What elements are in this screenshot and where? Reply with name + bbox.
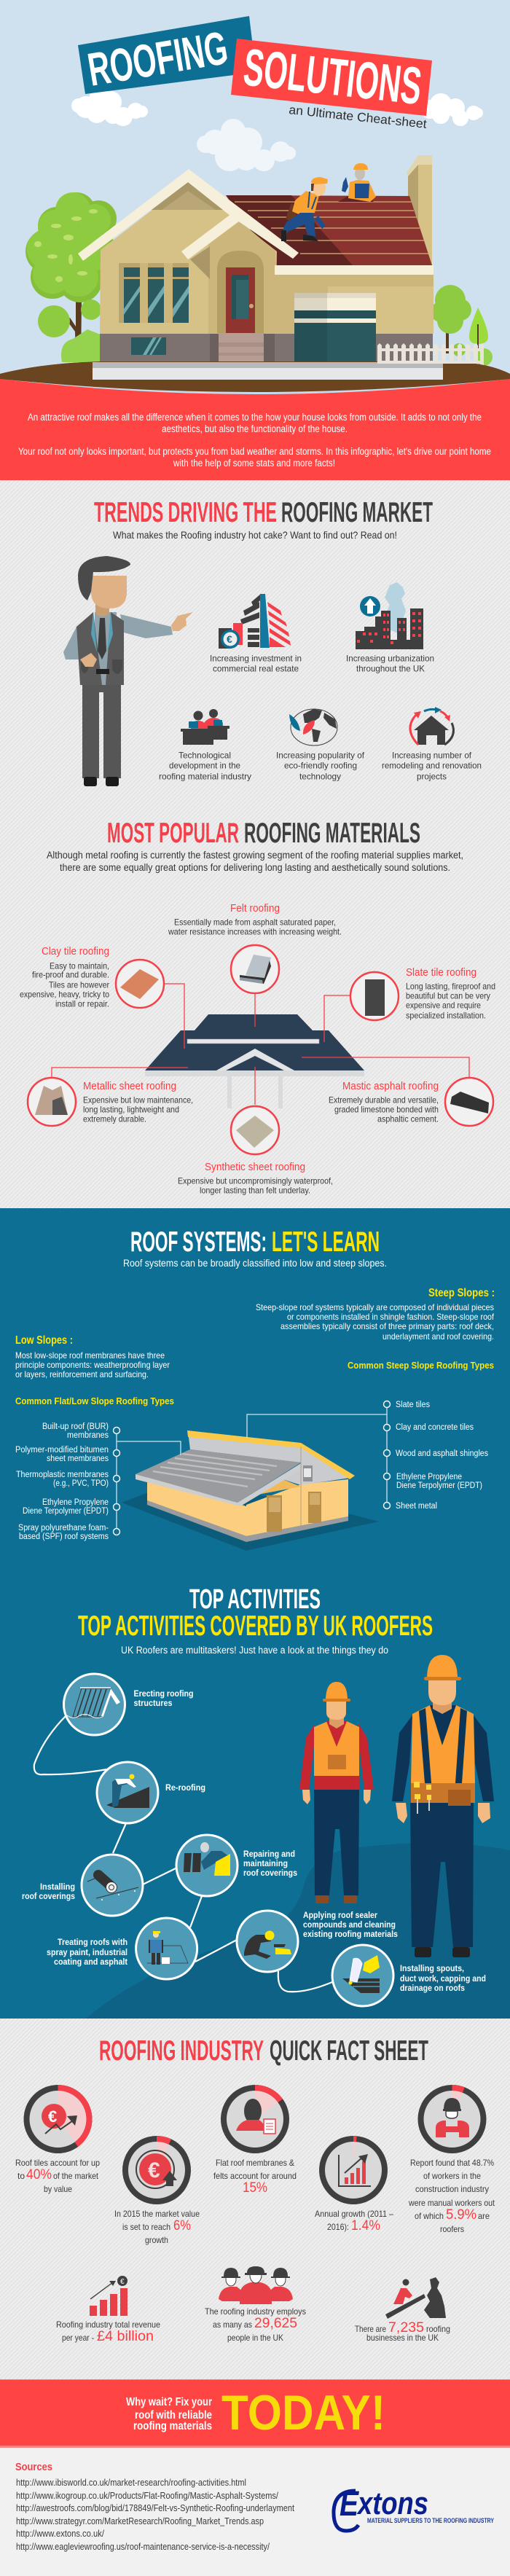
- house illustration: [122, 1430, 379, 1551]
- icon: building and coins: €: [227, 633, 232, 645]
- label: spray paint, industrial: [47, 1947, 128, 1957]
- label: [159, 751, 251, 781]
- sources heading: Sources: [15, 2462, 52, 2473]
- heading: ROOF SYSTEMS:: [130, 1226, 267, 1258]
- label: [210, 653, 302, 673]
- text: is set to reach: [122, 2222, 170, 2232]
- description: expensive and require: [406, 1000, 481, 1010]
- label: [47, 1937, 128, 1967]
- panel: hero: [0, 0, 510, 408]
- fact: construction workers: [408, 2088, 495, 2234]
- description: long lasting, lightweight and: [83, 1105, 179, 1115]
- source list: http://www.ikogroup.co.uk/Products/Flat-Roofing/Mastic-Asphalt-Systems/: [16, 2491, 278, 2501]
- source list: http://www.eagleviewroofing.us/roof-maintenance-service-is-a-necessity/: [16, 2542, 270, 2552]
- icon: roofer and UK map: [385, 2277, 446, 2319]
- attic shade: [152, 182, 224, 210]
- panel: call to action: [0, 2379, 510, 2448]
- description: specialized installation.: [406, 1010, 486, 1020]
- description: [168, 917, 342, 937]
- icon: people at desks: [181, 709, 230, 745]
- fact: revenue: [56, 2276, 160, 2344]
- label: structures: [134, 1698, 173, 1708]
- label: Installing spouts,: [400, 1963, 464, 1973]
- description: Tiles are however: [49, 979, 109, 990]
- icon: man on roof: [106, 1774, 149, 1808]
- label: roof coverings: [22, 1891, 75, 1901]
- label: Increasing number of: [392, 751, 472, 761]
- material: slate: Slate tile roofing: [406, 967, 476, 979]
- icon: felt sheets: [231, 945, 279, 993]
- icon: presenter man: [63, 556, 193, 786]
- label: Installing: [40, 1882, 75, 1892]
- fact: annual growth: 1.4%: [351, 2218, 380, 2234]
- text: [315, 2209, 393, 2232]
- text: businesses in the UK: [366, 2333, 439, 2343]
- low slope list: membranes: [67, 1431, 109, 1440]
- icon: left tree: [26, 192, 117, 362]
- label: remodeling and renovation: [382, 761, 482, 771]
- description: water resistance increases with increasing weight.: [168, 927, 342, 937]
- logo: extons: E: [340, 2485, 360, 2524]
- trend: remodeling: [382, 707, 482, 781]
- text: felts account for around: [213, 2171, 297, 2181]
- text: as many as: [213, 2319, 252, 2330]
- text: growth: [145, 2235, 168, 2245]
- description: [83, 1095, 193, 1124]
- icon: UK skyline: [356, 582, 423, 649]
- fact: businesses: 7,235: [388, 2320, 424, 2336]
- icon: globe and leaf: [289, 709, 337, 745]
- low slope list: Diene Terpolymer (EPDT): [23, 1507, 109, 1516]
- panel: intro: [0, 361, 510, 480]
- background hill: [86, 1843, 510, 2019]
- text: of which: [415, 2211, 444, 2221]
- label: development in the: [169, 761, 240, 771]
- title banner: solutions: [231, 38, 432, 116]
- intro text: aesthetics, but also the functionality of the house.: [162, 423, 348, 434]
- description: [329, 1095, 439, 1124]
- icon: asphalt block: [445, 1078, 493, 1126]
- label: roofing material industry: [159, 771, 251, 781]
- icon: cloud left: [71, 87, 148, 126]
- text: Roof tiles account for up: [15, 2158, 100, 2168]
- fact: construction workers: 5.9%: [446, 2207, 476, 2223]
- ring chart 15%: [224, 2088, 286, 2150]
- description: Essentially made from asphalt saturated paper,: [174, 917, 336, 927]
- heading: TRENDS DRIVING THE: [94, 497, 277, 528]
- icon: roof frame: [67, 1688, 120, 1718]
- ground hill: [0, 361, 510, 391]
- text: [213, 2158, 297, 2181]
- icon: spout tool: [342, 1955, 380, 1993]
- steep slope list: Slate tiles: [396, 1401, 430, 1409]
- fact: annual growth: [315, 2139, 393, 2234]
- label: [400, 1963, 486, 1993]
- activity: erecting: [64, 1674, 194, 1735]
- material: felt: Felt roofing: [230, 903, 280, 915]
- ring chart 6%: €: [148, 2158, 160, 2182]
- label: [22, 1882, 75, 1901]
- text: [15, 2158, 100, 2194]
- ring chart 40%: [26, 2088, 89, 2150]
- heading: ROOFING INDUSTRY: [99, 2035, 264, 2067]
- label: eco-friendly roofing: [284, 761, 357, 771]
- source list: http://www.strategyr.com/MarketResearch/Roofing_Market_Trends.asp: [16, 2516, 264, 2526]
- intro paragraph: [47, 850, 463, 873]
- icon: man repairing: [184, 1842, 230, 1876]
- material: mastic: [329, 1078, 493, 1126]
- low slope list: Polymer-modified bitumen: [15, 1446, 109, 1455]
- source list: [16, 2478, 294, 2552]
- roof diagram: [145, 1014, 364, 1108]
- low slope list: Ethylene Propylene: [42, 1498, 109, 1507]
- text: [205, 2306, 306, 2343]
- garage door: [294, 293, 376, 362]
- text: of the market: [53, 2171, 99, 2181]
- description: Expensive but low maintenance,: [83, 1095, 193, 1105]
- subheading: What makes the Roofing industry hot cake? Want to find out? Read on!: [113, 529, 397, 541]
- icon: pale cloud: [197, 119, 296, 171]
- low slopes text: or layers, reinforcement and surfacing.: [15, 1369, 149, 1379]
- text: [56, 2319, 160, 2343]
- icon: cloud right: [420, 93, 483, 126]
- text: construction industry: [415, 2184, 489, 2194]
- intro paragraph: there are some equally great options for delivering long lasting and aesthetically sound solutions.: [60, 862, 450, 873]
- logo: extons: [334, 2485, 494, 2531]
- ring chart 40%: €: [48, 2107, 57, 2126]
- connector path: [34, 1715, 332, 1992]
- material: mastic: Mastic asphalt roofing: [342, 1081, 439, 1092]
- trend: commercial real estate: [210, 594, 302, 673]
- call text: roof with reliable: [135, 2409, 212, 2422]
- material: clay: [20, 946, 164, 1009]
- description: longer lasting than felt underlay.: [200, 1185, 310, 1195]
- low slopes text: Common Flat/Low Slope Roofing Types: [15, 1395, 174, 1406]
- description: beautiful but can be very: [406, 991, 490, 1001]
- text: There are: [355, 2324, 386, 2334]
- sidewalk: [93, 362, 443, 379]
- icon: metal sheet: [28, 1078, 76, 1126]
- activity: re-roofing: [97, 1762, 205, 1823]
- roof trim: [78, 169, 434, 279]
- title word: ROOFING: [84, 21, 232, 96]
- text: Annual growth (2011 –: [315, 2209, 393, 2219]
- source list: http://www.ibisworld.co.uk/market-research/roofing-activities.html: [16, 2478, 246, 2488]
- icon: standing roofer: [338, 163, 376, 202]
- material: metallic: [28, 1078, 193, 1126]
- icon: synthetic sheet: [231, 1106, 279, 1154]
- ring chart 6%: [125, 2139, 188, 2201]
- small gable wall: [208, 221, 275, 334]
- text: of workers in the: [423, 2171, 481, 2181]
- material: synthetic: Synthetic sheet roofing: [205, 1162, 305, 1173]
- low slope list: (e.g., PVC, TPO): [53, 1479, 109, 1488]
- description: [20, 960, 109, 1009]
- label: [276, 751, 365, 781]
- text: The roofing industry employs: [205, 2306, 306, 2317]
- label: throughout the UK: [356, 663, 425, 673]
- low slopes text: Low Slopes :: [15, 1334, 73, 1347]
- trend: eco-friendly: [276, 709, 365, 781]
- label: projects: [417, 771, 447, 781]
- label: Erecting roofing: [134, 1688, 194, 1699]
- low slope list: Thermoplastic membranes: [16, 1471, 109, 1479]
- icon: roll: [87, 1875, 138, 1900]
- subtitle: an Ultimate Cheat-sheet: [289, 103, 428, 131]
- steep slope list: Diene Terpolymer (EPDT): [396, 1481, 482, 1490]
- label: Treating roofs with: [58, 1937, 128, 1947]
- label: [346, 653, 434, 673]
- label: compounds and cleaning: [303, 1919, 396, 1930]
- description: extremely durable.: [83, 1113, 146, 1124]
- fact: market value: 6%: [173, 2218, 191, 2234]
- label: technology: [299, 771, 341, 781]
- heading: MOST POPULAR: [107, 818, 239, 849]
- description: fire-proof and durable.: [32, 969, 109, 979]
- text: [408, 2158, 495, 2234]
- label: coating and asphalt: [54, 1957, 128, 1967]
- low slope dots: [114, 1427, 119, 1535]
- low slope connector: [117, 1430, 181, 1532]
- call text: Why wait? Fix your: [126, 2396, 212, 2408]
- icon: house with arrows: [410, 707, 453, 745]
- text: people in the UK: [227, 2333, 283, 2343]
- text: to: [17, 2171, 25, 2181]
- ring chart 5.9%: [421, 2088, 484, 2150]
- icon: kneeling man: [244, 1931, 291, 1959]
- text: roofers: [440, 2224, 464, 2234]
- material: slate: [350, 967, 495, 1020]
- icon: right worker: [392, 1655, 494, 1957]
- activity: installing coverings: [22, 1855, 143, 1916]
- material: clay: Clay tile roofing: [42, 946, 109, 958]
- text: In 2015 the market value: [114, 2209, 200, 2219]
- call text: [126, 2396, 212, 2432]
- description: Extremely durable and versatile,: [329, 1095, 439, 1105]
- connector lines: [52, 984, 469, 1105]
- subheading: Roof systems can be broadly classified into low and steep slopes.: [123, 1257, 387, 1269]
- fact: employment: [205, 2266, 306, 2343]
- description: graded limestone bonded with: [334, 1105, 439, 1115]
- text: were manual workers out: [408, 2198, 495, 2208]
- steep slope list: Wood and asphalt shingles: [396, 1449, 488, 1458]
- icon: right trees: [431, 285, 493, 366]
- label: duct work, capping and: [400, 1973, 486, 1984]
- low slope list: Built-up roof (BUR): [42, 1422, 109, 1431]
- fact: roof tiles: [15, 2088, 100, 2194]
- text: are: [478, 2211, 490, 2221]
- icon: clay tile: [116, 960, 164, 1008]
- steep slope list: Ethylene Propylene: [396, 1473, 462, 1481]
- panel: top activities: [22, 1584, 510, 2019]
- fact: employment: 29,625: [254, 2316, 297, 2331]
- steep slopes text: underlayment and roof covering.: [382, 1331, 494, 1342]
- low slopes text: Most low-slope roof membranes have three: [15, 1350, 165, 1361]
- heading: TOP ACTIVITIES: [189, 1584, 321, 1615]
- fact: revenue: £4 billion: [97, 2329, 154, 2344]
- material: synthetic: [178, 1106, 333, 1195]
- fact: businesses: [355, 2277, 450, 2343]
- label: Applying roof sealer: [303, 1910, 377, 1920]
- icon: revenue bars: [90, 2276, 128, 2316]
- activity: applying sealer: [237, 1910, 398, 1972]
- steep slopes text: Common Steep Slope Roofing Types: [348, 1360, 494, 1371]
- description: install or repair.: [55, 998, 109, 1009]
- low slope list: sheet membranes: [47, 1455, 109, 1463]
- label: drainage on roofs: [400, 1983, 465, 1993]
- text: Flat roof membranes &: [216, 2158, 294, 2168]
- steps: [219, 333, 264, 362]
- label: Increasing popularity of: [276, 751, 365, 761]
- label: [134, 1688, 194, 1708]
- panel: roof systems: [0, 1208, 510, 2019]
- label: maintaining: [243, 1858, 288, 1868]
- label: existing roofing materials: [303, 1929, 398, 1939]
- foundation: [100, 334, 433, 362]
- description: Expensive but uncompromisingly waterproof,: [178, 1176, 333, 1186]
- fence: [377, 343, 484, 369]
- material: metallic: Metallic sheet roofing: [83, 1081, 176, 1092]
- heading: LET'S LEARN: [272, 1226, 380, 1258]
- panel: trends: [0, 480, 510, 1209]
- steep slope list: Clay and concrete tiles: [396, 1423, 474, 1432]
- text: 2016):: [327, 2222, 349, 2232]
- panel: fact sheet: [0, 2019, 510, 2379]
- panel: sources: [15, 2462, 494, 2552]
- text: by value: [44, 2184, 72, 2194]
- low slope list: [15, 1422, 109, 1541]
- steep slope dots: [383, 1401, 391, 1508]
- label: [303, 1910, 398, 1939]
- intro text: with the help of some stats and more facts!: [173, 458, 335, 469]
- steep slopes text: assemblies typically consist of three primary parts: roof deck,: [280, 1321, 494, 1331]
- description: asphaltic cement.: [377, 1113, 439, 1124]
- steep slopes text: [256, 1287, 495, 1371]
- description: expensive, heavy, tricky to: [20, 990, 109, 1000]
- steep slope list: Sheet metal: [396, 1502, 437, 1511]
- subheading: UK Roofers are multitaskers! Just have a look at the things they do: [121, 1645, 388, 1656]
- label: Increasing investment in: [210, 653, 302, 663]
- front door: [217, 251, 264, 333]
- right roof: [226, 195, 432, 265]
- icon: painter: [147, 1931, 188, 1965]
- label: Increasing urbanization: [346, 653, 434, 663]
- low slopes text: principle components: weatherproofing layer: [15, 1360, 170, 1370]
- steep slope list: [396, 1401, 488, 1511]
- text: roofing: [426, 2324, 450, 2334]
- text: Report found that 48.7%: [410, 2158, 494, 2168]
- label: Re-roofing: [165, 1782, 205, 1793]
- small bush: [38, 300, 102, 362]
- text: Roofing industry total revenue: [56, 2319, 160, 2330]
- icon: three workers: [219, 2266, 293, 2304]
- title banner: roofing: [78, 16, 254, 96]
- intro paragraph: Although metal roofing is currently the fastest growing segment of the roofing material supplies market,: [47, 850, 463, 861]
- panel: materials: [20, 818, 495, 1195]
- text: [355, 2324, 450, 2343]
- ring chart 1.4%: [322, 2139, 385, 2201]
- low slopes text: [15, 1334, 174, 1406]
- icon: slate tile: [350, 972, 399, 1020]
- call text: roofing materials: [133, 2420, 212, 2432]
- fact: roof tiles: 40%: [26, 2167, 52, 2182]
- trend: technology: [159, 709, 251, 781]
- description: Long lasting, fireproof and: [406, 981, 495, 991]
- activity: repairing: [176, 1835, 297, 1896]
- label: [382, 751, 482, 781]
- intro text: [18, 412, 491, 469]
- windows: [119, 263, 189, 323]
- label: Technological: [178, 751, 231, 761]
- heading: [78, 1584, 433, 1642]
- fact: market value: [114, 2139, 200, 2245]
- steep slopes text: Steep Slopes :: [428, 1287, 495, 1299]
- label: Repairing and: [243, 1849, 295, 1859]
- garage wall: [275, 275, 434, 334]
- description: Easy to maintain,: [50, 960, 109, 971]
- logo: extons: xtons: [356, 2486, 428, 2521]
- fact: flat roof membranes: 15%: [243, 2180, 267, 2196]
- text: [114, 2209, 200, 2245]
- activity: treating: [47, 1918, 197, 1979]
- material: felt: [168, 903, 342, 993]
- icon: revenue bars: €: [120, 2278, 125, 2286]
- source list: http://awestroofs.com/blog/bid/178849/Felt-vs-Synthetic-Roofing-underlayment: [16, 2503, 294, 2513]
- activity: spouts: [332, 1945, 486, 2006]
- label: [243, 1849, 297, 1878]
- text: per year -: [62, 2333, 94, 2343]
- low slope list: Spray polyurethane foam-: [18, 1524, 109, 1532]
- label: commercial real estate: [213, 663, 299, 673]
- today word: TODAY!: [221, 2385, 385, 2440]
- source list: http://www.extons.co.uk/: [16, 2529, 104, 2539]
- icon: kneeling roofer: [280, 177, 328, 241]
- description: [178, 1176, 333, 1195]
- main wall: [100, 182, 277, 334]
- sky crescent under hill: [15, 380, 495, 394]
- icon: left worker: [299, 1682, 374, 1903]
- steep slope connector: [247, 1404, 387, 1506]
- panel: red band behind hill: [0, 379, 510, 408]
- label: roof coverings: [243, 1868, 297, 1878]
- low slope list: based (SPF) roof systems: [19, 1532, 109, 1541]
- trend: urbanization: [346, 582, 434, 673]
- description: [406, 981, 495, 1020]
- fact: flat roof membranes: [213, 2088, 297, 2196]
- icon: chimney: [407, 155, 432, 265]
